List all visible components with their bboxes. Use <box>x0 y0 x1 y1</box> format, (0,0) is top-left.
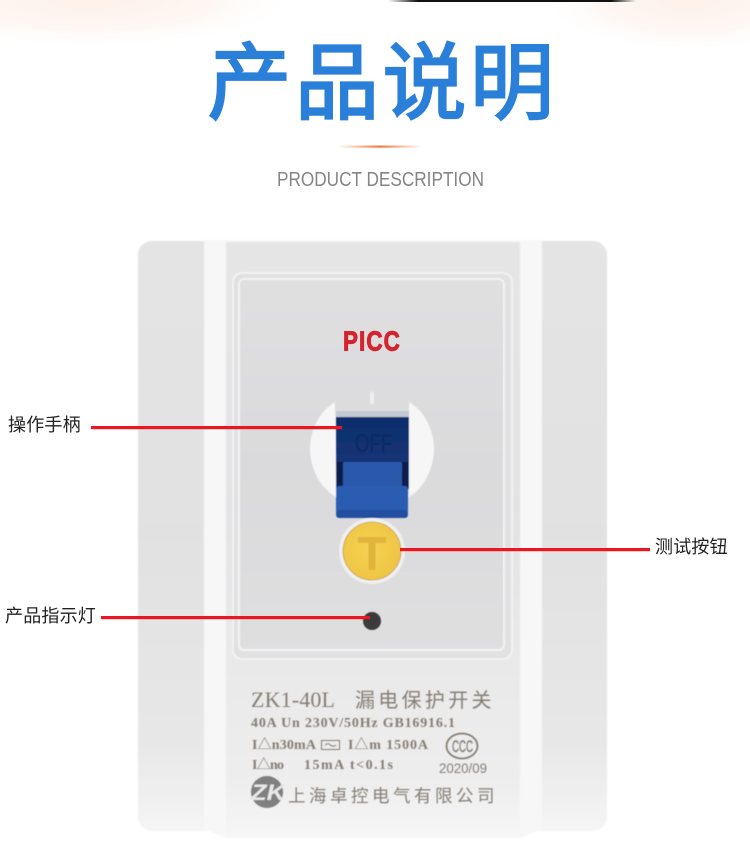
orange divider <box>338 146 422 148</box>
model line <box>251 687 495 712</box>
residual current line <box>252 737 429 753</box>
operating handle <box>310 402 434 518</box>
residual current line: I△n30mA <box>252 737 317 753</box>
device body <box>138 240 607 838</box>
rating line: 40A Un 230V/50Hz GB16916.1 <box>251 716 455 731</box>
nameplate text <box>250 687 498 808</box>
trip time line: I△no <box>252 757 284 773</box>
CCC mark: CCC <box>452 737 473 756</box>
callout: indicator light: 产品指示灯 <box>5 606 96 626</box>
residual current line: I△m 1500A <box>348 737 429 753</box>
test button <box>339 518 405 584</box>
model line: ZK1-40L <box>251 687 335 712</box>
switch frame and plate <box>233 273 512 659</box>
title: 产品说明 <box>207 36 558 130</box>
callout: test button: 测试按钮 <box>655 537 728 557</box>
product: leakage protection switch <box>138 240 607 838</box>
ZK logo: ZK <box>250 780 287 805</box>
callout: test button <box>400 537 728 557</box>
PICC logo: PICC <box>343 326 400 357</box>
callout: operating handle <box>8 415 342 435</box>
on/off tick <box>370 392 374 404</box>
company name: 上海卓控电气有限公司 <box>288 786 498 806</box>
ZK logo <box>250 776 287 808</box>
CCC mark <box>446 734 478 758</box>
callout: operating handle: 操作手柄 <box>8 415 81 435</box>
model line: 漏电保护开关 <box>355 689 495 712</box>
trip time line: 15mA t<0.1s <box>304 758 394 773</box>
operating handle: OFF <box>355 430 392 458</box>
callout: indicator light <box>5 606 370 626</box>
indicator light <box>363 612 381 630</box>
date: 2020/09 <box>439 760 487 776</box>
subtitle: PRODUCT DESCRIPTION <box>277 169 484 191</box>
trip time line <box>252 757 394 773</box>
